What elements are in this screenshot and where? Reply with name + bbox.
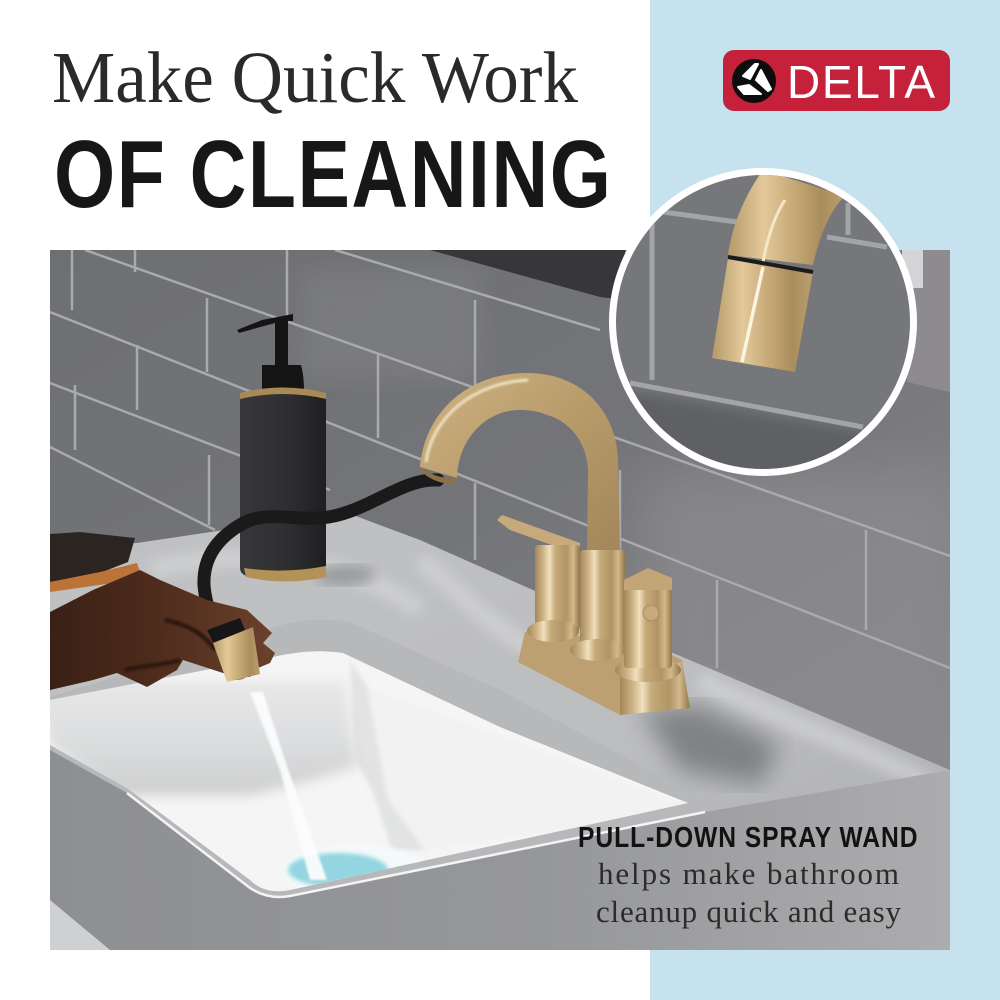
right handle xyxy=(615,662,681,682)
caption: PULL-DOWN SPRAY WAND xyxy=(578,821,918,853)
faucet shadow xyxy=(640,705,780,785)
center body xyxy=(580,550,625,648)
mirror xyxy=(430,250,625,300)
water stream xyxy=(250,692,327,880)
caption: helps make bathroom xyxy=(598,856,899,891)
faucet base xyxy=(518,632,690,715)
lower countertop xyxy=(50,750,950,950)
background panel: light blue xyxy=(650,0,1000,1000)
hose xyxy=(204,480,438,628)
inset circle: spray head closeup xyxy=(609,168,917,476)
logo: Delta: DELTA xyxy=(787,56,935,108)
title xyxy=(52,37,612,228)
countertop xyxy=(50,516,950,896)
logo: Delta xyxy=(723,50,950,111)
sink basin xyxy=(50,651,688,892)
caption: cleanup quick and easy xyxy=(596,894,902,929)
foam xyxy=(304,850,422,887)
title: OF CLEANING xyxy=(54,121,612,228)
caption xyxy=(578,821,918,929)
title: Make Quick Work xyxy=(52,37,578,118)
wall tiles xyxy=(50,250,960,780)
hand and spray wand xyxy=(50,570,275,690)
soap bottle xyxy=(237,314,326,582)
photo: bathroom sink with faucet xyxy=(30,250,960,950)
left lever handle xyxy=(497,515,580,548)
hairbrush xyxy=(50,532,140,592)
faucet xyxy=(420,373,690,715)
bottle shadow xyxy=(315,565,375,585)
